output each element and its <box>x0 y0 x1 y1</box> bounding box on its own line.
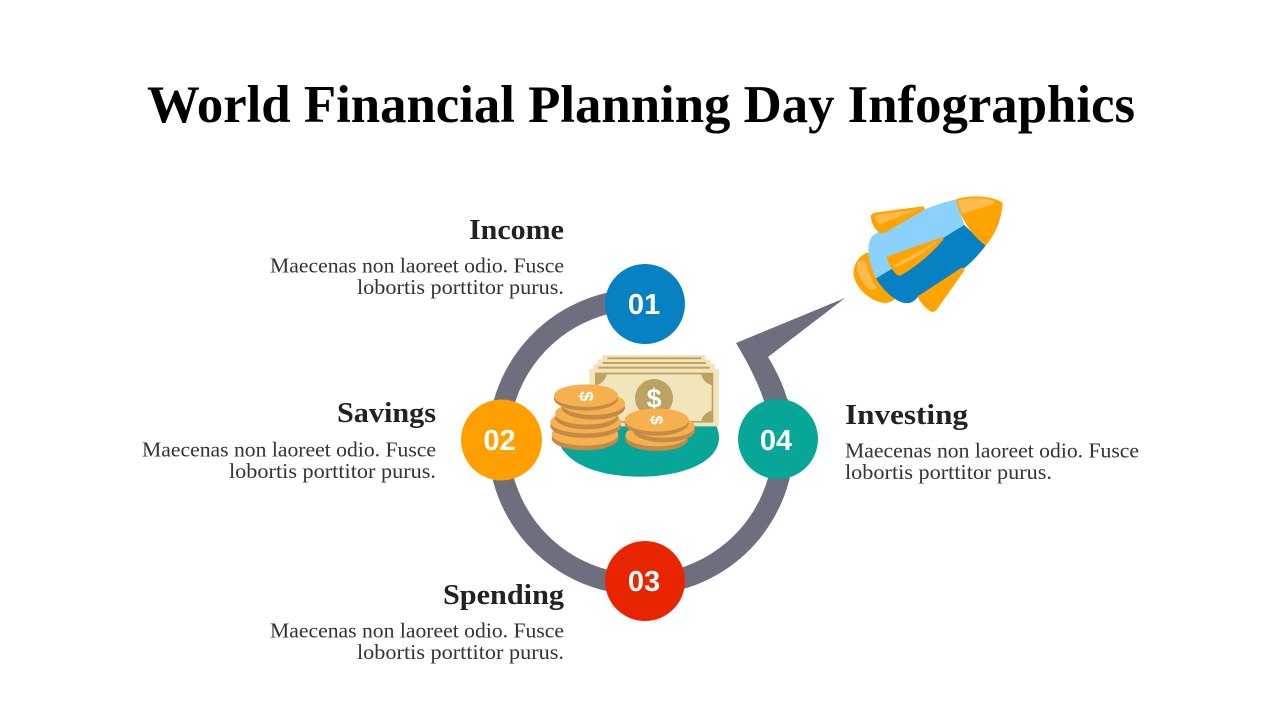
circle 04 <box>738 399 818 479</box>
text block: savings: Savings <box>337 397 436 429</box>
text block: spending: Spending <box>443 579 565 611</box>
text block: investing <box>845 399 1139 484</box>
text block: income: Maecenas non laoreet odio. Fusce <box>270 254 564 278</box>
text block: income: Income <box>469 214 564 246</box>
icon: money and coins: $ <box>647 415 666 425</box>
text block: investing: Maecenas non laoreet odio. Fusce <box>845 438 1139 462</box>
icon: money and coins: $ <box>576 391 597 402</box>
icon: rocket <box>853 196 1003 312</box>
circle 01 <box>605 264 685 344</box>
ring with arrow <box>499 298 845 584</box>
text block: savings: Maecenas non laoreet odio. Fusce <box>142 438 436 462</box>
text block: spending <box>270 579 565 664</box>
circle 03 <box>605 541 685 621</box>
circle 01: 01 <box>628 289 660 321</box>
circle 02: 02 <box>483 425 516 457</box>
circle 03: 03 <box>628 566 660 598</box>
text block: investing: lobortis porttitor purus. <box>845 460 1052 484</box>
circle 04: 04 <box>760 425 792 457</box>
text block: savings: lobortis porttitor purus. <box>229 459 436 483</box>
icon: money and coins: $ <box>647 384 662 414</box>
text block: investing: Investing <box>845 399 969 431</box>
text block: spending: lobortis porttitor purus. <box>357 640 564 664</box>
text block: income: lobortis porttitor purus. <box>357 275 564 299</box>
text block: income <box>270 214 564 299</box>
title: World Financial Planning Day Infographics <box>147 76 1135 134</box>
text block: savings <box>142 397 436 483</box>
circle 02 <box>461 400 542 480</box>
icon: money and coins <box>550 355 719 477</box>
text block: spending: Maecenas non laoreet odio. Fusce <box>270 618 564 642</box>
